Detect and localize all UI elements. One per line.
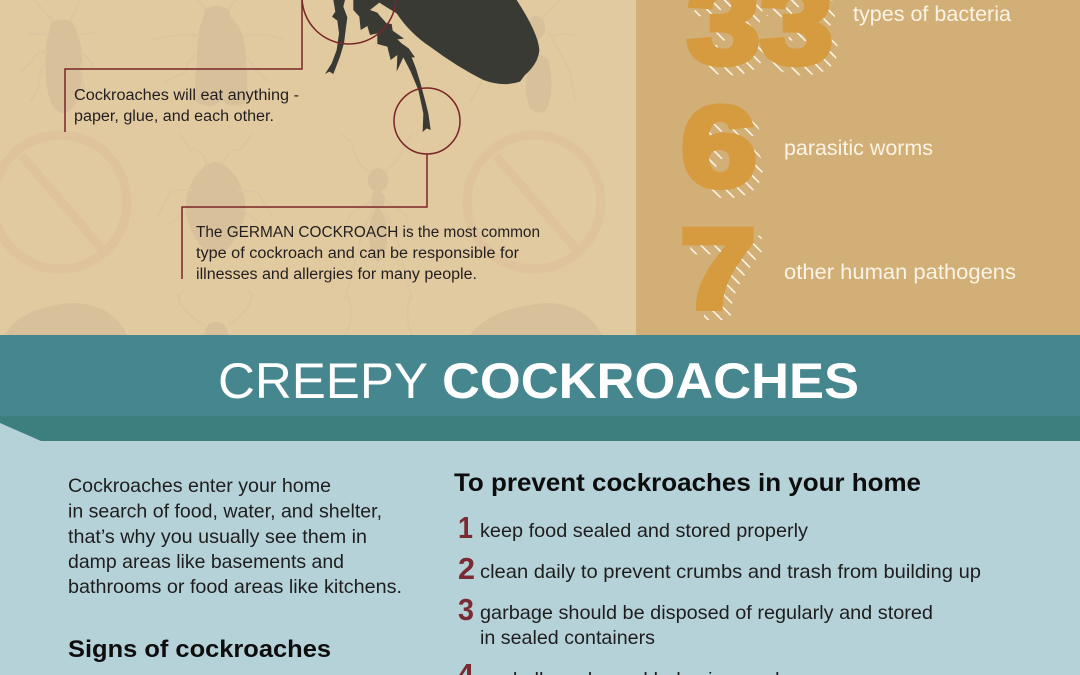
stat: 33 types of bacteria: [687, 0, 1011, 96]
title: CREEPY: [218, 353, 428, 409]
panel: tan background: [0, 0, 636, 335]
text block: eats anything: Cockroaches will eat anything -: [74, 87, 299, 104]
list: prevention steps: [457, 510, 981, 675]
text block: german cockroach: type of cockroach and can be responsible for: [196, 245, 519, 262]
callout line: top: [65, 0, 302, 132]
ghost icon: mosquito: [470, 0, 578, 113]
step 3: in sealed containers: [480, 627, 655, 649]
illustration: cockroach: [325, 0, 539, 132]
text block: intro: [68, 475, 402, 598]
text block: intro: bathrooms or food areas like kitchens.: [68, 576, 402, 598]
title: [218, 353, 859, 409]
ghost icon: cockroach: [20, 0, 94, 113]
stat: 7 other human pathogens: 7: [680, 206, 756, 333]
text block: german cockroach: [196, 224, 540, 283]
text block: intro: in search of food, water, and shelter,: [68, 500, 382, 522]
step 3: [458, 592, 933, 649]
ghost icon: ant: [340, 134, 412, 300]
ghost icon: lower bug: [178, 290, 252, 335]
step 1: 1: [458, 510, 473, 545]
text block: intro: damp areas like basements and: [68, 551, 344, 573]
panel: statistics: [636, 0, 1080, 335]
stat: 7 other human pathogens: other human pathogens: [784, 261, 1016, 284]
callout line: bottom: [182, 154, 427, 279]
stat: 6 parasitic worms: 6: [688, 92, 764, 219]
callout circle: leg tip: [394, 88, 460, 154]
title: COCKROACHES: [442, 353, 859, 409]
step 1: [458, 510, 808, 545]
step 1: keep food sealed and stored properly: [480, 520, 808, 542]
stat: 7 other human pathogens: [680, 206, 1016, 342]
text block: intro: Cockroaches enter your home: [68, 475, 331, 497]
text block: german cockroach: illnesses and allergies for many people.: [196, 266, 477, 283]
text block: intro: that’s why you usually see them in: [68, 526, 367, 548]
banner fold: [0, 416, 1080, 441]
stat: 6 parasitic worms: [681, 84, 933, 219]
step 3: 3: [458, 592, 474, 627]
text block: eats anything: paper, glue, and each other.: [74, 108, 274, 125]
ghost icon: lower ant legs: [345, 296, 412, 335]
step 3: garbage should be disposed of regularly and stored: [480, 602, 933, 624]
stat: 7 other human pathogens: 7: [688, 215, 764, 342]
text block: german cockroach: The GERMAN COCKROACH is the most common: [196, 224, 540, 241]
ghost icon: bed bug: [158, 134, 272, 255]
step 2: clean daily to prevent crumbs and trash from building up: [480, 561, 981, 583]
heading: signs of cockroaches: Signs of cockroaches: [68, 636, 331, 663]
callout circle: leg spines: [302, 0, 396, 44]
ghost shape: bottom right mound: [470, 303, 602, 335]
icon: prohibition sign left: [0, 135, 127, 269]
text block: eats anything: [74, 87, 299, 125]
title banner: [0, 335, 1080, 416]
stat: 6 parasitic worms: 6: [681, 84, 757, 211]
cockroach hind leg with spines: [353, 0, 431, 132]
cockroach wing body: [375, 0, 539, 84]
background pattern: insect silhouettes: [5, 0, 602, 335]
step 2: [458, 551, 981, 586]
ghost icon: fly: [150, 0, 284, 106]
stat: 33 types of bacteria: types of bacteria: [853, 3, 1011, 26]
heading: to prevent: To prevent cockroaches in your home: [454, 469, 921, 497]
cockroach front leg: [325, 0, 347, 74]
step 2: 2: [458, 551, 475, 586]
ghost shape: bottom left mound: [5, 303, 127, 335]
icon: prohibition sign right: [467, 135, 601, 269]
step 4: [457, 657, 826, 675]
stat: 6 parasitic worms: parasitic worms: [784, 137, 933, 160]
